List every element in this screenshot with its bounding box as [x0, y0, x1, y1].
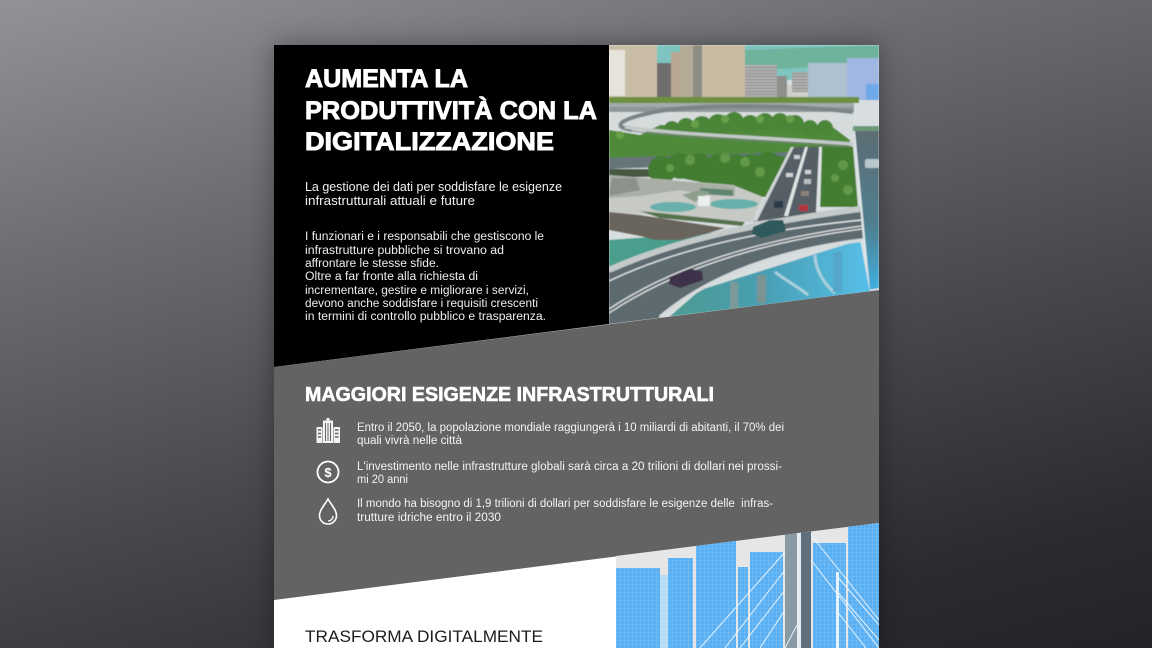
intro paragraph: Oltre a far fronte alla richiesta di [305, 271, 478, 283]
text: water [357, 498, 773, 524]
intro paragraph: incrementare, gestire e migliorare i servizi, [305, 285, 529, 297]
intro paragraph: affrontare le stesse sfide. [305, 258, 439, 270]
subtitle: infrastrutturali attuali e future [305, 194, 475, 208]
title [305, 65, 597, 156]
text: investment: mi 20 anni [357, 474, 408, 486]
icon: dollar coin [318, 462, 338, 482]
panel: document page [274, 45, 879, 648]
heading: digital transformation: TRASFORMA DIGITALMENTE [305, 627, 543, 646]
image: blue city skyline with bridge [616, 520, 879, 648]
text: population: Entro il 2050, la popolazione mondiale raggiungerà i 10 miliardi di abitanti, il 70% dei [357, 422, 784, 434]
text: investment [357, 461, 782, 486]
title: DIGITALIZZAZIONE [305, 128, 554, 156]
heading: infrastructure needs: MAGGIORI ESIGENZE INFRASTRUTTURALI [305, 384, 714, 406]
intro paragraph: I funzionari e i responsabili che gestiscono le [305, 231, 544, 243]
icon: water drop [320, 499, 336, 524]
icon: city buildings [316, 418, 340, 443]
text: water: Il mondo ha bisogno di 1,9 trilioni di dollari per soddisfare le esigenze delle infras- [357, 498, 773, 510]
front ramp [625, 127, 853, 144]
intro paragraph: infrastrutture pubbliche si trovano ad [305, 245, 504, 257]
intro paragraph: in termini di controllo pubblico e trasparenza. [305, 311, 546, 323]
back ramp [620, 106, 853, 130]
subtitle: La gestione dei dati per soddisfare le esigenze [305, 180, 562, 194]
image: highway interchange [609, 45, 879, 326]
intro paragraph [305, 231, 546, 323]
text: water: trutture idriche entro il 2030 [357, 512, 501, 524]
panel: grey infrastructure section [274, 290, 879, 600]
text: investment: L'investimento nelle infrastrutture globali sarà circa a 20 trilioni di dollari nei prossi- [357, 461, 782, 473]
text: population [357, 422, 784, 447]
intro paragraph: devono anche soddisfare i requisiti crescenti [305, 298, 538, 310]
icon: dollar coin: $ [324, 465, 332, 480]
panel: black header [274, 45, 609, 367]
title: AUMENTA LA [305, 65, 468, 93]
text: population: quali vivrà nelle città [357, 435, 463, 447]
subtitle [305, 180, 562, 208]
title: PRODUTTIVITÀ CON LA [305, 96, 597, 125]
